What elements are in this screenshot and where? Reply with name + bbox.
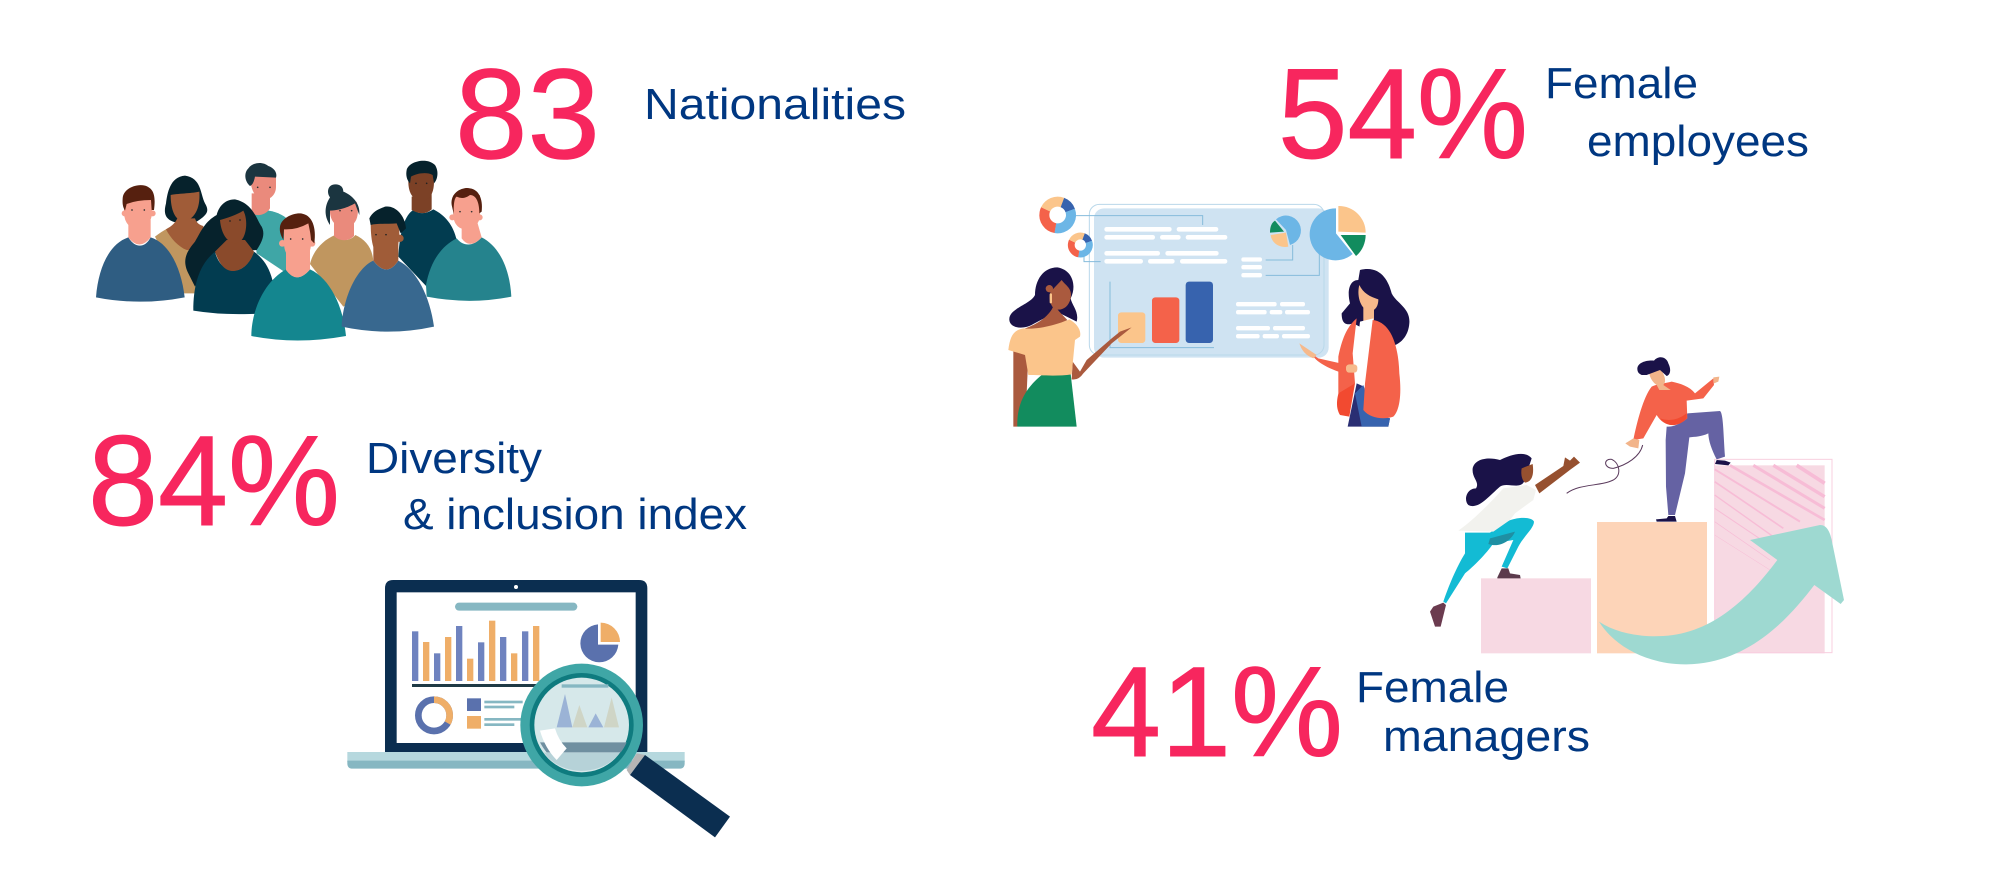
label female managers: managers [1383,712,1590,761]
person: woman tan shirt middle [310,184,373,307]
person: man teal shirt right [426,188,511,301]
laptop body [347,580,685,769]
steps [1481,459,1832,653]
ribbon between hands [1567,445,1643,493]
screen bar chart [412,621,545,687]
donut chart small [1068,233,1092,257]
arrow [1599,525,1844,664]
label diversity and inclusion index: Diversity [366,434,542,483]
pie chart small [1270,216,1301,247]
illustration: group of people [96,161,511,340]
screen pie chart [580,623,620,662]
number 41%: 41% [1091,641,1343,784]
stat: 84% diversity and inclusion index [88,410,747,553]
person: man blue shirt front [342,206,434,332]
person: man teal shirt back [245,163,287,273]
label female employees: employees [1587,117,1809,166]
woman right presenting [1299,269,1409,427]
number 54%: 54% [1278,43,1528,186]
label female managers: Female [1356,663,1509,712]
screen donut chart [418,700,450,731]
helping woman [1625,357,1731,522]
person: woman dark shirt [185,199,277,314]
climbing woman [1430,454,1580,627]
person: man navy shirt back right [398,161,457,287]
dashboard panel [1076,204,1329,358]
illustration: laptop with magnifying glass [347,580,730,837]
person: man teal shirt front [251,213,346,340]
pie chart large [1310,206,1366,260]
screen legend [467,698,523,729]
number 83: 83 [455,43,600,186]
illustration: two women presenting dashboard [1008,197,1409,427]
magnifying glass [520,664,730,837]
stat: 54% female employees [1278,43,1809,186]
person: woman tan shirt back left [155,176,207,293]
illustration: women climbing steps with arrow [1430,357,1844,664]
label diversity and inclusion index: & inclusion index [403,490,747,539]
person: man blue shirt left [96,185,185,302]
stat: 83 nationalities [455,43,906,186]
label nationalities: Nationalities [644,80,906,129]
label female employees: Female [1545,59,1698,108]
stat: 41% female managers [1091,641,1590,784]
donut chart large [1040,197,1075,233]
number 84%: 84% [88,410,340,553]
woman left pointing [1008,267,1132,427]
bar chart [1110,282,1214,348]
